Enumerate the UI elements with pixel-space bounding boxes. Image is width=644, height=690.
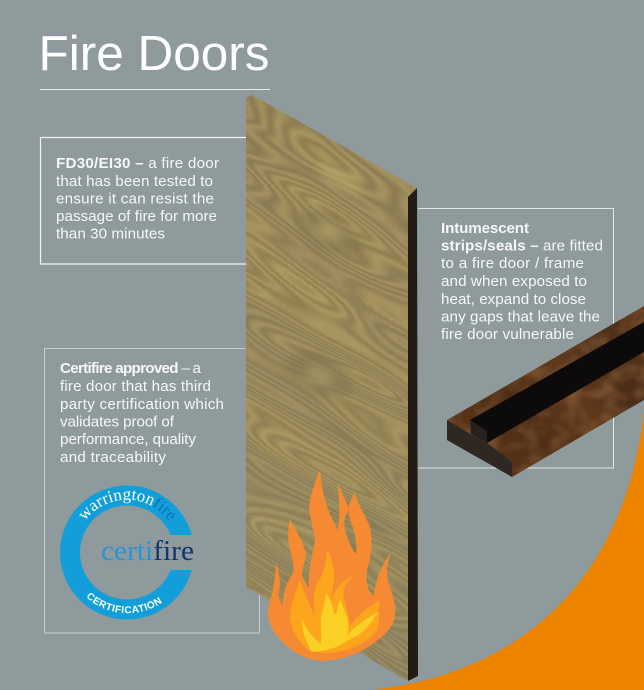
text block: Certifire definition: and traceability bbox=[60, 449, 166, 466]
title underline bbox=[40, 89, 270, 90]
outer flame bbox=[268, 470, 395, 661]
text block: FD30/EI30 definition: passage of fire for more bbox=[56, 208, 217, 225]
text block: FD30/EI30 definition: FD30/EI30 – a fire door bbox=[56, 155, 219, 172]
text block: Certifire definition: fire door that has third bbox=[60, 378, 211, 395]
fire door illustration bbox=[246, 86, 418, 690]
text block: intumescent definition: heat, expand to close bbox=[441, 291, 586, 308]
text block: FD30/EI30 definition: than 30 minutes bbox=[56, 226, 165, 242]
door side edge bbox=[408, 188, 418, 681]
text block: intumescent definition: any gaps that leave the bbox=[441, 308, 600, 326]
panel frame bbox=[44, 348, 260, 633]
text block: FD30/EI30 definition bbox=[56, 155, 219, 242]
channel end bbox=[470, 420, 487, 443]
text block: Certifire definition: party certification which bbox=[60, 396, 224, 413]
panel: FD30/EI30 bbox=[40, 138, 246, 264]
text block: intumescent definition: strips/seals – are fitted bbox=[441, 238, 603, 254]
text block: FD30/EI30 definition: that has been tested to bbox=[56, 173, 213, 190]
text block: intumescent definition: fire door vulnerable bbox=[441, 326, 574, 343]
strip end face bbox=[447, 420, 512, 477]
icon: certifire logo: warringtonfire bbox=[79, 490, 174, 520]
door face with wood grain bbox=[246, 86, 418, 690]
text block: Certifire definition: validates proof of bbox=[60, 414, 175, 430]
flame illustration bbox=[268, 470, 395, 661]
text block: intumescent definition bbox=[441, 220, 603, 343]
panel: Intumescent strips bbox=[418, 208, 614, 468]
text block: Certifire definition: performance, quality bbox=[60, 431, 196, 448]
text block: Certifire definition bbox=[60, 360, 224, 466]
panel frame bbox=[40, 138, 246, 264]
orange corner curve bbox=[372, 412, 644, 690]
intumescent seal channel bbox=[470, 322, 644, 443]
text block: intumescent definition: Intumescent bbox=[441, 220, 529, 237]
title: Fire Doors bbox=[38, 27, 270, 81]
strip wood surface bbox=[447, 306, 644, 477]
intumescent strip illustration bbox=[447, 306, 644, 477]
text block: intumescent definition: to a fire door / frame bbox=[441, 255, 584, 272]
text block: intumescent definition: and when exposed to bbox=[441, 273, 587, 290]
inner flame bbox=[302, 592, 378, 652]
icon: certifire logo bbox=[60, 486, 194, 620]
panel frame bbox=[418, 208, 614, 468]
middle flame bbox=[290, 549, 380, 653]
icon: certifire logo: CERTIFICATION bbox=[87, 593, 162, 614]
icon: certifire logo: certifire bbox=[101, 535, 194, 567]
panel: Certifire approved bbox=[44, 348, 260, 634]
text block: FD30/EI30 definition: ensure it can resist the bbox=[56, 190, 214, 208]
text block: Certifire definition: Certifire approved – a bbox=[60, 360, 202, 377]
